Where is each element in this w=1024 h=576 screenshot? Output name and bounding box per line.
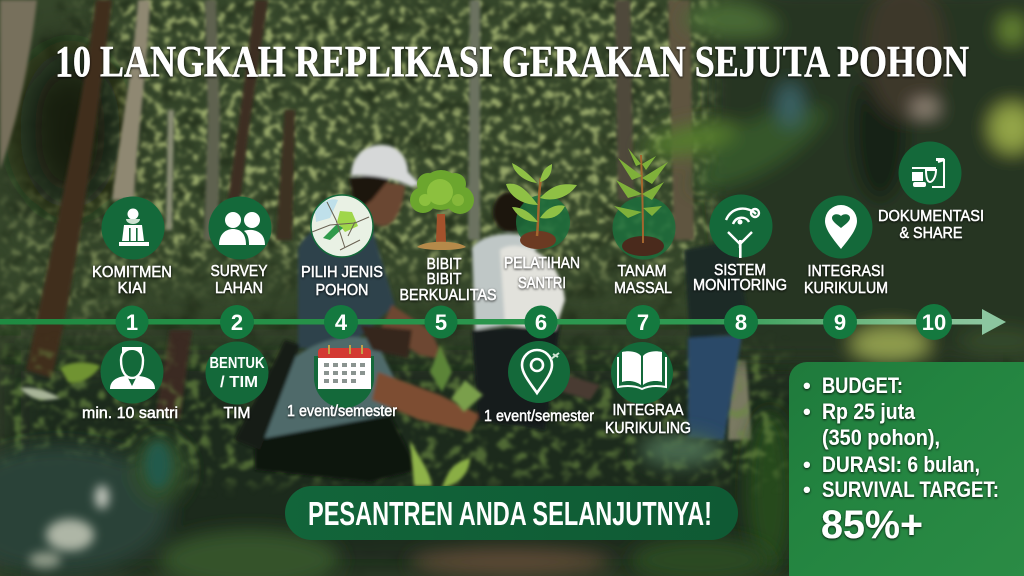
number 8 (724, 305, 758, 339)
duration: • (803, 452, 811, 477)
step 9 top: dokumentasi and share: DOKUMENTASI (878, 208, 984, 225)
number 9: 9 (834, 310, 846, 335)
number 9 (823, 305, 857, 339)
step 4 top: bibit berkualitas: BIBIT (426, 256, 462, 273)
icon: tree (410, 170, 474, 250)
number 7 (626, 305, 660, 339)
lower item: calendar event (287, 345, 398, 420)
lower item: location event (484, 341, 595, 425)
icon: calendar (314, 345, 374, 408)
step 6 top: tanam massal: MASSAL (614, 280, 672, 297)
icon: person with tie (100, 340, 164, 404)
duration: DURASI: 6 bulan, (822, 452, 980, 477)
panel: budget summary (789, 362, 1024, 576)
step 4 top: bibit berkualitas (400, 170, 496, 304)
step number badges (116, 304, 952, 340)
budget line (803, 373, 903, 398)
step 6 top: tanam massal: TANAM (618, 263, 666, 280)
number 2: 2 (231, 310, 243, 335)
step 8 top: integrasi kurikulum (804, 196, 888, 297)
icon: location pin (508, 341, 570, 403)
survival percentage: 85%+ (821, 503, 923, 547)
icon: monitoring signal (710, 194, 772, 258)
lower item: bentuk tim (206, 342, 268, 422)
step 1 top: komitmen kiai: KOMITMEN (92, 264, 172, 281)
number 10: 10 (922, 310, 946, 335)
foreground blurred leaves right (640, 0, 1024, 570)
number 5 (424, 306, 458, 338)
number 6 (524, 306, 558, 338)
step 1 top: komitmen kiai: KIAI (118, 280, 146, 297)
foreground seedlings (20, 345, 483, 488)
step 7 top: sistem monitoring: MONITORING (693, 277, 787, 294)
icon: text badge: BENTUK (210, 355, 265, 372)
understory plants (0, 342, 788, 490)
icon: documentation (898, 142, 962, 204)
cost line: • (803, 399, 811, 424)
step 9 top: dokumentasi and share (878, 142, 984, 242)
lower item: location event: 1 event/semester (484, 408, 595, 425)
number 10 (916, 304, 952, 340)
icon: text badge: / TIM (220, 374, 258, 391)
cost line: Rp 25 juta (822, 399, 916, 424)
step 5 top: pelatihan santri: PELATIHAN (504, 255, 580, 272)
icon: seedling (506, 163, 577, 249)
step 2 top: survey lahan: SURVEY (210, 263, 268, 280)
icon: kiai (102, 196, 164, 260)
number 6: 6 (535, 310, 547, 335)
call to action banner (285, 486, 738, 540)
number 2 (220, 305, 254, 339)
icon: heart pin (810, 196, 872, 258)
step 3 top: pilih jenis pohon: PILIH JENIS (301, 264, 383, 281)
lower item: bentuk tim: TIM (224, 405, 250, 422)
icon: two people (208, 196, 272, 260)
people (235, 145, 750, 482)
icon: text badge (206, 342, 268, 404)
survival target: • (803, 477, 811, 502)
lower item: integrasi kurikulum book: INTEGRAA (612, 402, 684, 419)
step 7 top: sistem monitoring: SISTEM (714, 262, 766, 279)
number 1: 1 (126, 310, 138, 335)
lower item: integrasi kurikulum book: KURIKULING (605, 420, 691, 437)
lower item: min. 10 santri (82, 340, 178, 422)
step 2 top: survey lahan (208, 196, 272, 297)
step 9 top: dokumentasi and share: & SHARE (900, 225, 962, 242)
step 4 top: bibit berkualitas: BIBIT (426, 271, 462, 288)
number 5: 5 (435, 310, 447, 335)
blurred foreground foliage (0, 434, 770, 576)
call to action banner: PESANTREN ANDA SELANJUTNYA! (308, 495, 712, 532)
step 3 top: pilih jenis pohon (301, 195, 383, 299)
lower item: min. 10 santri: min. 10 santri (82, 405, 178, 422)
number 1 (116, 306, 148, 338)
step 7 top: sistem monitoring (693, 194, 787, 294)
number 7: 7 (637, 310, 649, 335)
number 4: 4 (335, 310, 348, 335)
tree count: (350 pohon), (822, 425, 940, 450)
step 4 top: bibit berkualitas: BERKUALITAS (400, 287, 496, 304)
icon: map (311, 195, 373, 257)
trunks (0, 0, 37, 170)
budget line: BUDGET: (822, 373, 903, 398)
step 8 top: integrasi kurikulum: KURIKULUM (804, 280, 888, 297)
step 5 top: pelatihan santri: SANTRI (518, 275, 566, 292)
step 8 top: integrasi kurikulum: INTEGRASI (808, 263, 884, 280)
budget line: • (803, 373, 811, 398)
lower item: calendar event: 1 event/semester (287, 403, 398, 420)
number 8: 8 (735, 310, 747, 335)
step 6 top: tanam massal (612, 148, 676, 297)
icon: open book (611, 342, 673, 404)
timeline arrow (0, 309, 1006, 335)
step 1 top: komitmen kiai (92, 196, 172, 297)
step 2 top: survey lahan: LAHAN (215, 280, 263, 297)
icon: young tree (612, 148, 676, 260)
step 5 top: pelatihan santri (504, 163, 580, 292)
lower item: integrasi kurikulum book (605, 342, 691, 437)
number 4 (324, 305, 358, 339)
step 3 top: pilih jenis pohon: POHON (316, 282, 368, 299)
